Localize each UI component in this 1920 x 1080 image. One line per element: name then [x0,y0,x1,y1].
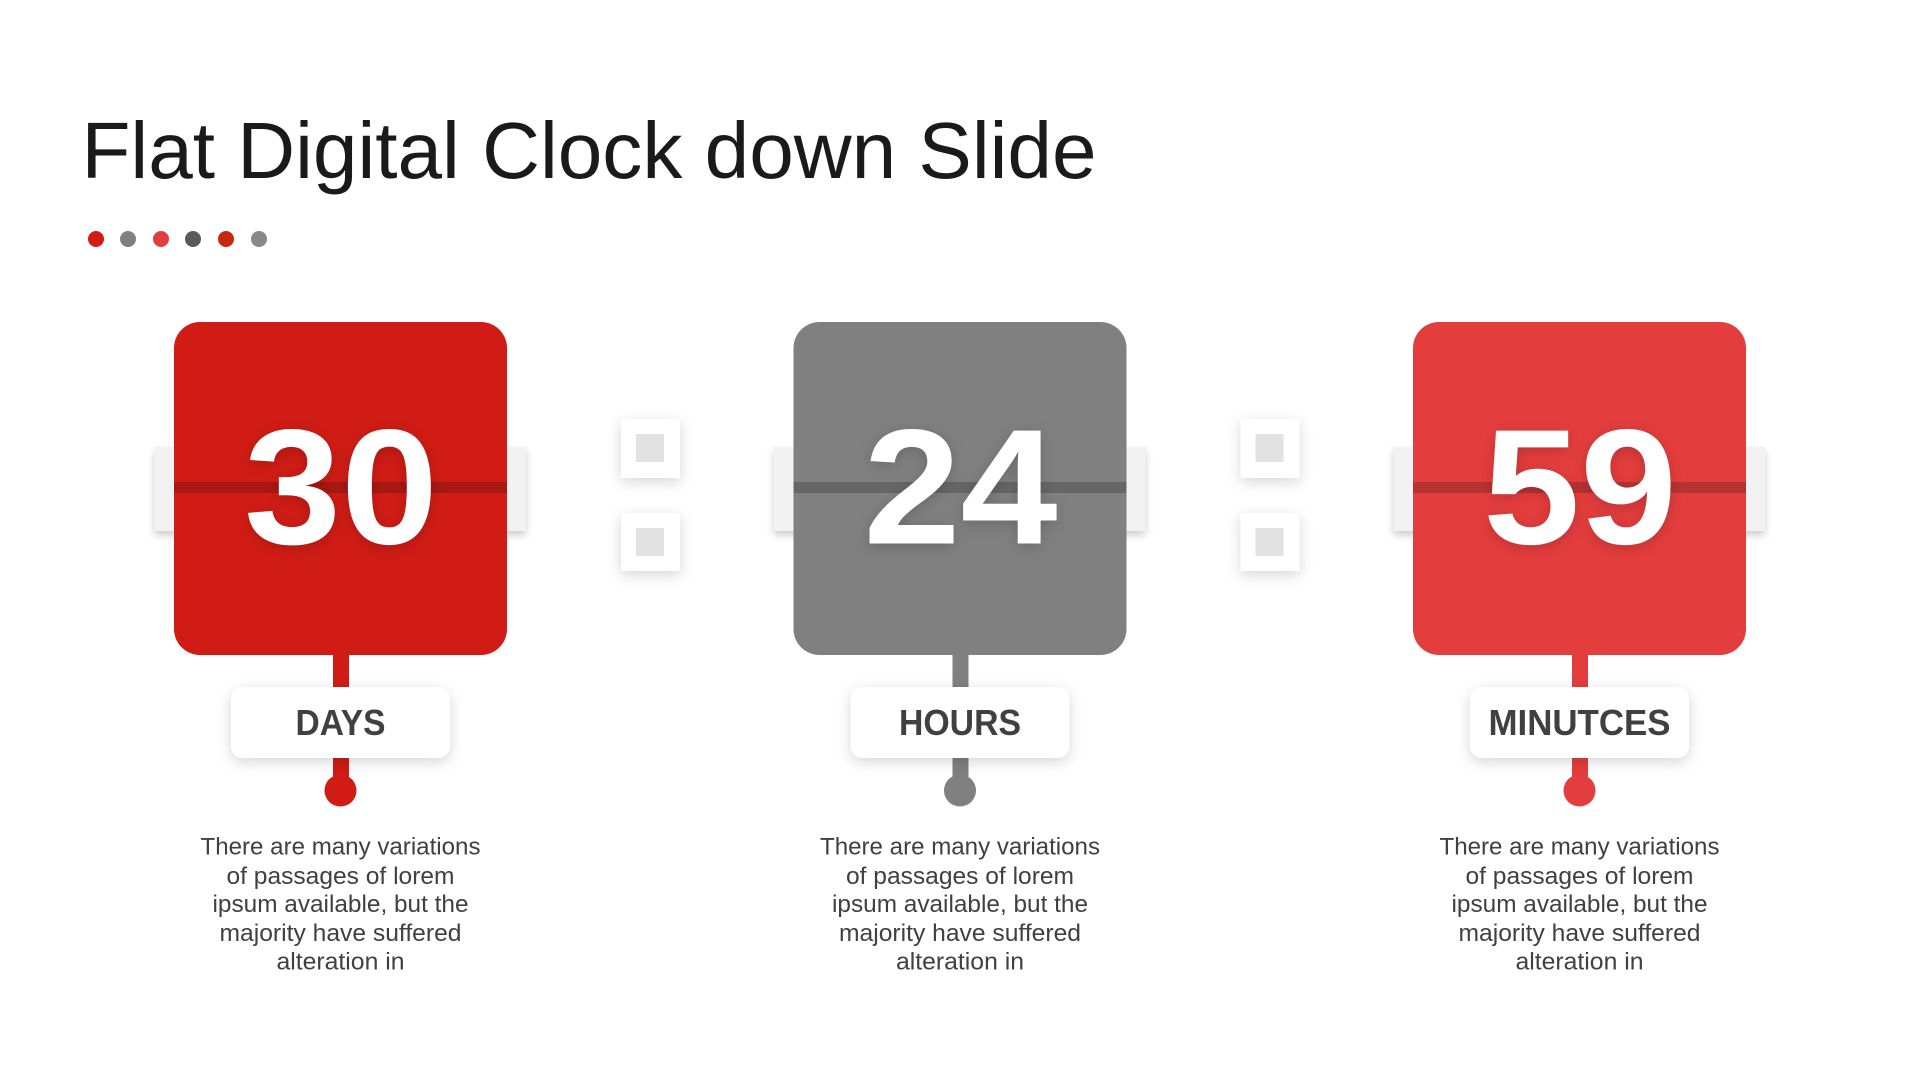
description: alteration in [276,948,404,976]
label text: MINUTCES [1488,702,1670,743]
description: There are many variations [820,834,1100,860]
end dot [1564,774,1596,806]
description: There are many variations [1440,834,1720,860]
decorative dot row [88,231,267,247]
panel: days [154,322,526,976]
description [820,834,1100,976]
description: majority have suffered [839,920,1081,947]
colon: hours to minutes [1240,419,1300,571]
description: alteration in [896,948,1024,976]
end dot [944,774,976,806]
left tab [154,447,180,531]
label text: DAYS [296,702,386,743]
clock card [794,322,1126,655]
description: majority have suffered [1458,920,1700,947]
flip band [794,482,1126,493]
description: of passages of lorem [846,863,1074,890]
clock card [1413,322,1746,655]
description: of passages of lorem [226,863,454,890]
stem [1572,650,1588,780]
description: ipsum available, but the [212,891,468,918]
left tab [1394,447,1420,531]
right tab [1741,447,1765,531]
panel: hours [774,322,1146,976]
description: of passages of lorem [1466,863,1694,890]
flip band [174,482,507,493]
right tab [502,447,526,531]
stem [952,650,968,780]
number: 59 [1483,396,1677,578]
colon: days to hours [621,419,680,571]
label box [850,687,1070,758]
left tab [774,447,800,531]
number: 24 [864,396,1058,578]
clock card [174,322,507,655]
title: Flat Digital Clock down Slide [82,106,1096,195]
label box [231,687,450,758]
description [200,834,480,976]
description: majority have suffered [220,920,462,947]
stem [333,650,349,780]
end dot [324,774,356,806]
description: There are many variations [200,834,480,860]
label text: HOURS [899,702,1021,743]
description: ipsum available, but the [1452,891,1708,918]
label box [1470,687,1689,758]
description [1440,834,1720,976]
description: alteration in [1516,948,1644,976]
right tab [1122,447,1146,531]
description: ipsum available, but the [832,891,1088,918]
panel: minutes [1394,322,1765,976]
number: 30 [244,396,438,578]
flip band [1413,482,1746,493]
